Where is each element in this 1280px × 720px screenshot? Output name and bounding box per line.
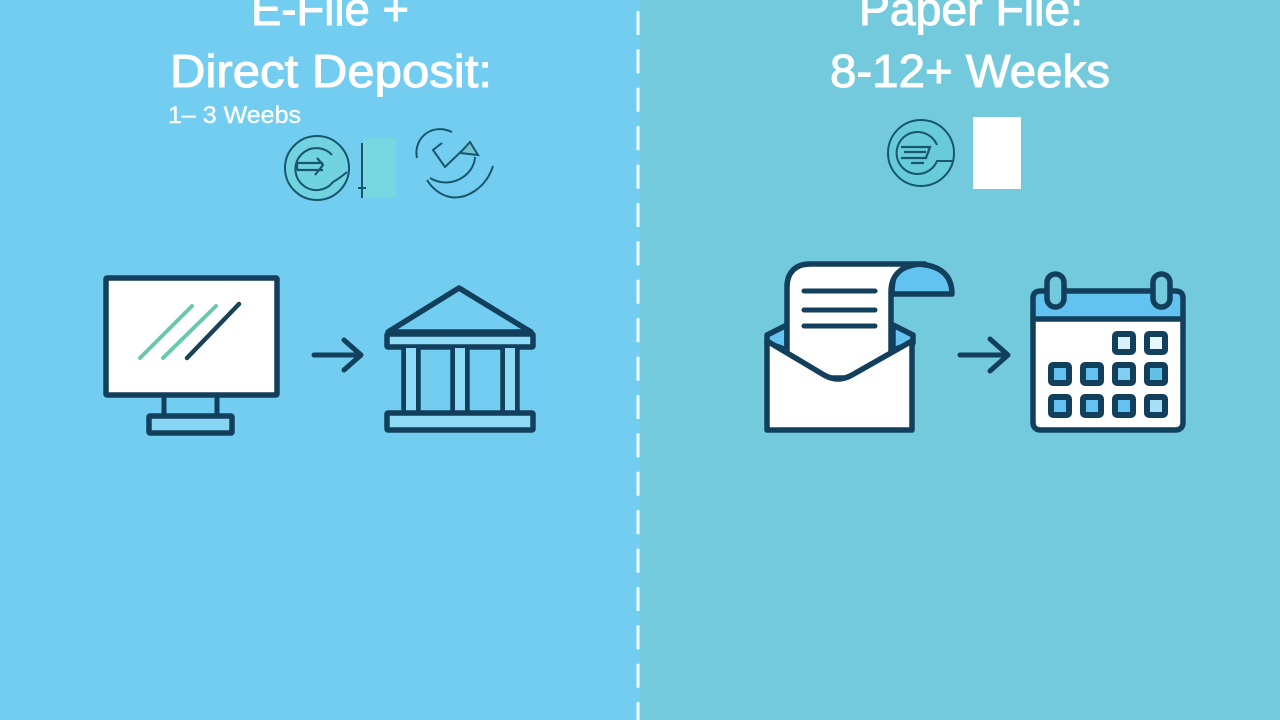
icon: refund coin: [285, 136, 349, 200]
calendar day squares: [1051, 334, 1165, 415]
icon: computer monitor: [106, 278, 277, 433]
heading: paper file: [830, 0, 1110, 97]
icon: bank: [387, 288, 533, 430]
panel: paper file: [640, 0, 1280, 720]
icon: circular check: [416, 129, 493, 197]
icon: white document: [973, 117, 1021, 189]
heading: e-file: Direct Deposit:: [170, 45, 492, 97]
icon: envelope with letter: [767, 264, 952, 430]
text: 1-3 weeks: 1– 3 Weebs: [168, 102, 301, 129]
arrow: envelope to calendar: [960, 339, 1008, 371]
icon: teal document with down arrow: [358, 138, 396, 198]
icon: calendar: [1033, 274, 1183, 430]
panel: e-file: [0, 0, 640, 720]
icon: paper coin: [888, 120, 954, 186]
heading: e-file: [170, 0, 492, 97]
arrow: computer to bank: [314, 340, 361, 370]
heading: paper file: 8-12+ Weeks: [830, 45, 1110, 97]
